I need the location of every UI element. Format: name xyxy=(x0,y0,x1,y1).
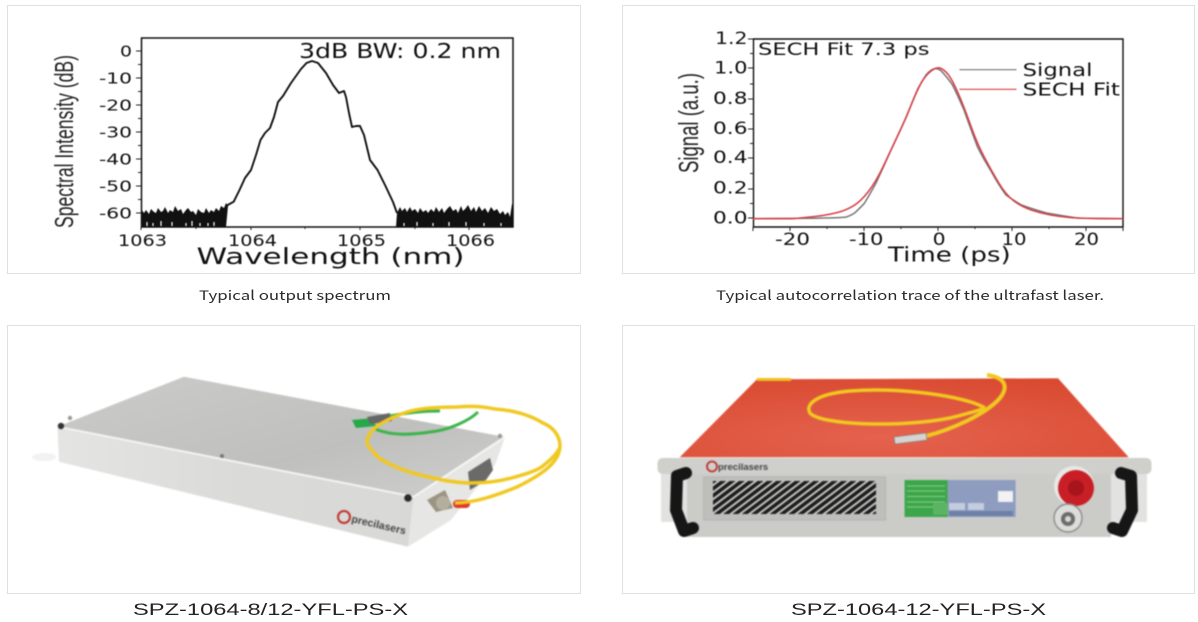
annotation: fit width: SECH Fit 7.3 ps xyxy=(758,40,930,60)
y axis labels xyxy=(99,42,132,222)
logo: precilasers xyxy=(718,462,768,473)
x axis labels xyxy=(118,231,495,250)
yellow fiber xyxy=(367,406,560,503)
annotation: bandwidth: 3dB BW: 0.2 nm xyxy=(299,39,501,63)
y axis labels: -60 xyxy=(99,204,132,222)
grille xyxy=(704,477,886,520)
x axis labels: -20 xyxy=(775,230,810,250)
y axis labels: 1.2 xyxy=(715,29,748,49)
caption: compact module model: SPZ-1064-8/12-YFL-PS-X xyxy=(133,600,408,619)
touch screen xyxy=(905,480,1016,517)
emergency stop xyxy=(1054,466,1094,506)
illustration: laser module xyxy=(32,377,560,547)
y axis labels: -40 xyxy=(99,150,132,168)
y axis labels: 0 xyxy=(120,42,132,60)
y axis title: Signal (a.u.) xyxy=(673,73,704,173)
key switch xyxy=(1054,504,1082,532)
fiber cable xyxy=(809,375,1005,444)
y axis labels xyxy=(713,29,748,228)
y axis labels: 0.4 xyxy=(713,148,748,168)
x axis title: Time (ps) xyxy=(887,243,1011,267)
y axis labels: -50 xyxy=(99,178,132,196)
x axis labels: 0 xyxy=(933,230,946,250)
x axis labels: 1063 xyxy=(118,231,167,250)
left handle xyxy=(676,473,693,531)
y axis labels: 0.6 xyxy=(713,119,748,139)
legend xyxy=(1023,61,1120,100)
x axis labels: 1065 xyxy=(337,231,386,250)
y axis labels: 0.2 xyxy=(713,179,748,199)
y axis labels: 0.0 xyxy=(713,208,748,228)
x axis labels xyxy=(775,230,1099,250)
y axis labels: -10 xyxy=(99,70,132,88)
x axis labels: 1066 xyxy=(446,231,495,250)
y axis labels: 0.8 xyxy=(713,89,748,109)
panel: compact laser module photo xyxy=(8,326,580,594)
legend: Signal xyxy=(1023,61,1092,81)
illustration: rack laser xyxy=(658,375,1152,537)
x axis labels: 10 xyxy=(1002,230,1026,250)
right handle xyxy=(1113,473,1132,531)
line chart: autocorrelation xyxy=(748,39,1123,231)
caption: spectrum: Typical output spectrum xyxy=(199,285,391,304)
x axis title: Wavelength (nm) xyxy=(196,245,464,270)
green fiber connector xyxy=(352,411,478,434)
panel: output spectrum chart xyxy=(8,6,580,274)
x axis labels: -10 xyxy=(849,230,884,250)
legend: SECH Fit xyxy=(1023,80,1120,100)
y axis labels: -30 xyxy=(99,124,132,142)
y axis labels: 1.0 xyxy=(714,58,748,78)
panel: rack laser photo xyxy=(622,326,1194,594)
x axis labels: 1064 xyxy=(228,231,277,250)
x axis labels: 20 xyxy=(1074,230,1099,250)
y axis labels: -20 xyxy=(99,96,132,114)
logo: precilasers xyxy=(350,513,407,537)
caption: rack laser model: SPZ-1064-12-YFL-PS-X xyxy=(791,600,1046,619)
caption: autocorrelation: Typical autocorrelation trace of the ultrafast laser. xyxy=(716,285,1104,304)
panel: autocorrelation chart xyxy=(622,6,1194,274)
line chart: spectrum xyxy=(136,38,513,230)
